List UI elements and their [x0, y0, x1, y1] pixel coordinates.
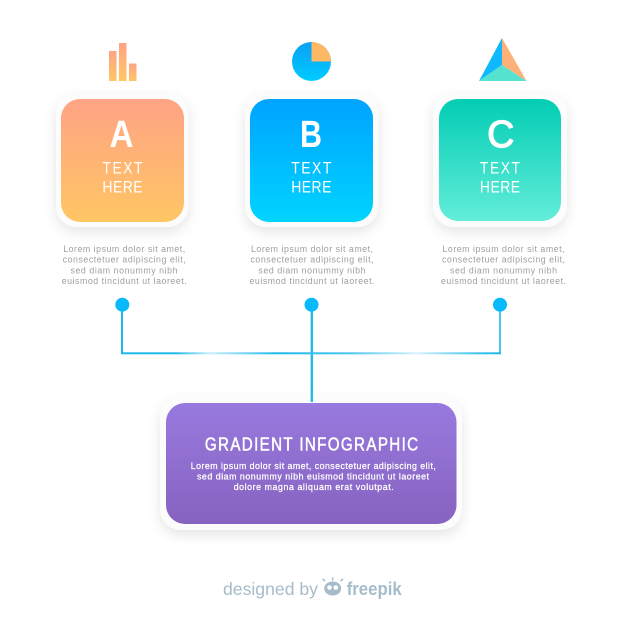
body text [191, 461, 436, 492]
icon: bar chart [109, 43, 136, 81]
text block: C description: Lorem ipsum dolor sit amet, [442, 244, 564, 254]
icon: freepik mascot [322, 578, 343, 596]
panel: card B [245, 93, 378, 227]
panel: card C [433, 93, 567, 227]
label A [102, 159, 143, 197]
text block: A description: euismod tincidunt ut laoreet. [62, 276, 187, 286]
label B [291, 159, 332, 197]
label C [480, 159, 521, 197]
label A: TEXT [102, 159, 143, 178]
icon: pyramid [479, 38, 526, 81]
text block: A description: sed diam nonummy nibh [70, 265, 178, 275]
text block: A description: consectetuer adipiscing elit, [63, 255, 186, 265]
label A: HERE [102, 178, 143, 197]
label B: HERE [291, 178, 331, 197]
footer: designed by freepik [223, 578, 403, 599]
connector dot left [115, 298, 129, 312]
text block: B description [250, 244, 374, 286]
connector dot centre [304, 298, 318, 312]
connector lines [121, 305, 501, 402]
text block: A description [62, 244, 187, 286]
body text: Lorem ipsum dolor sit amet, consectetuer adipiscing elit, [191, 461, 436, 471]
text block: B description: Lorem ipsum dolor sit amet, [251, 244, 373, 254]
label C: TEXT [480, 159, 521, 178]
label C: HERE [480, 178, 520, 197]
icon: pie chart [292, 42, 331, 81]
body text: dolore magna aliquam erat volutpat. [234, 482, 394, 492]
connector dot right [493, 298, 507, 312]
text block: C description [441, 244, 566, 286]
text block: B description: euismod tincidunt ut laoreet. [250, 276, 374, 286]
text block: A description: Lorem ipsum dolor sit amet, [63, 244, 185, 254]
label B: TEXT [291, 159, 332, 178]
footer: designed by freepik: designed by [223, 579, 318, 599]
letter C: C [487, 114, 514, 156]
letter B: B [300, 114, 322, 156]
footer: designed by freepik: freepik [347, 579, 403, 599]
letter A: A [110, 114, 134, 156]
text block: C description: consectetuer adipiscing elit, [442, 255, 565, 265]
heading: GRADIENT INFOGRAPHIC [205, 434, 418, 455]
body text: sed diam nonummy nibh euismod tincidunt ut laoreet [197, 471, 430, 481]
panel: card A [56, 93, 188, 227]
panel: gradient infographic [160, 396, 462, 530]
text block: B description: consectetuer adipiscing elit, [250, 255, 374, 265]
text block: B description: sed diam nonummy nibh [258, 265, 366, 275]
text block: C description: euismod tincidunt ut laoreet. [441, 276, 566, 286]
text block: C description: sed diam nonummy nibh [450, 265, 557, 275]
